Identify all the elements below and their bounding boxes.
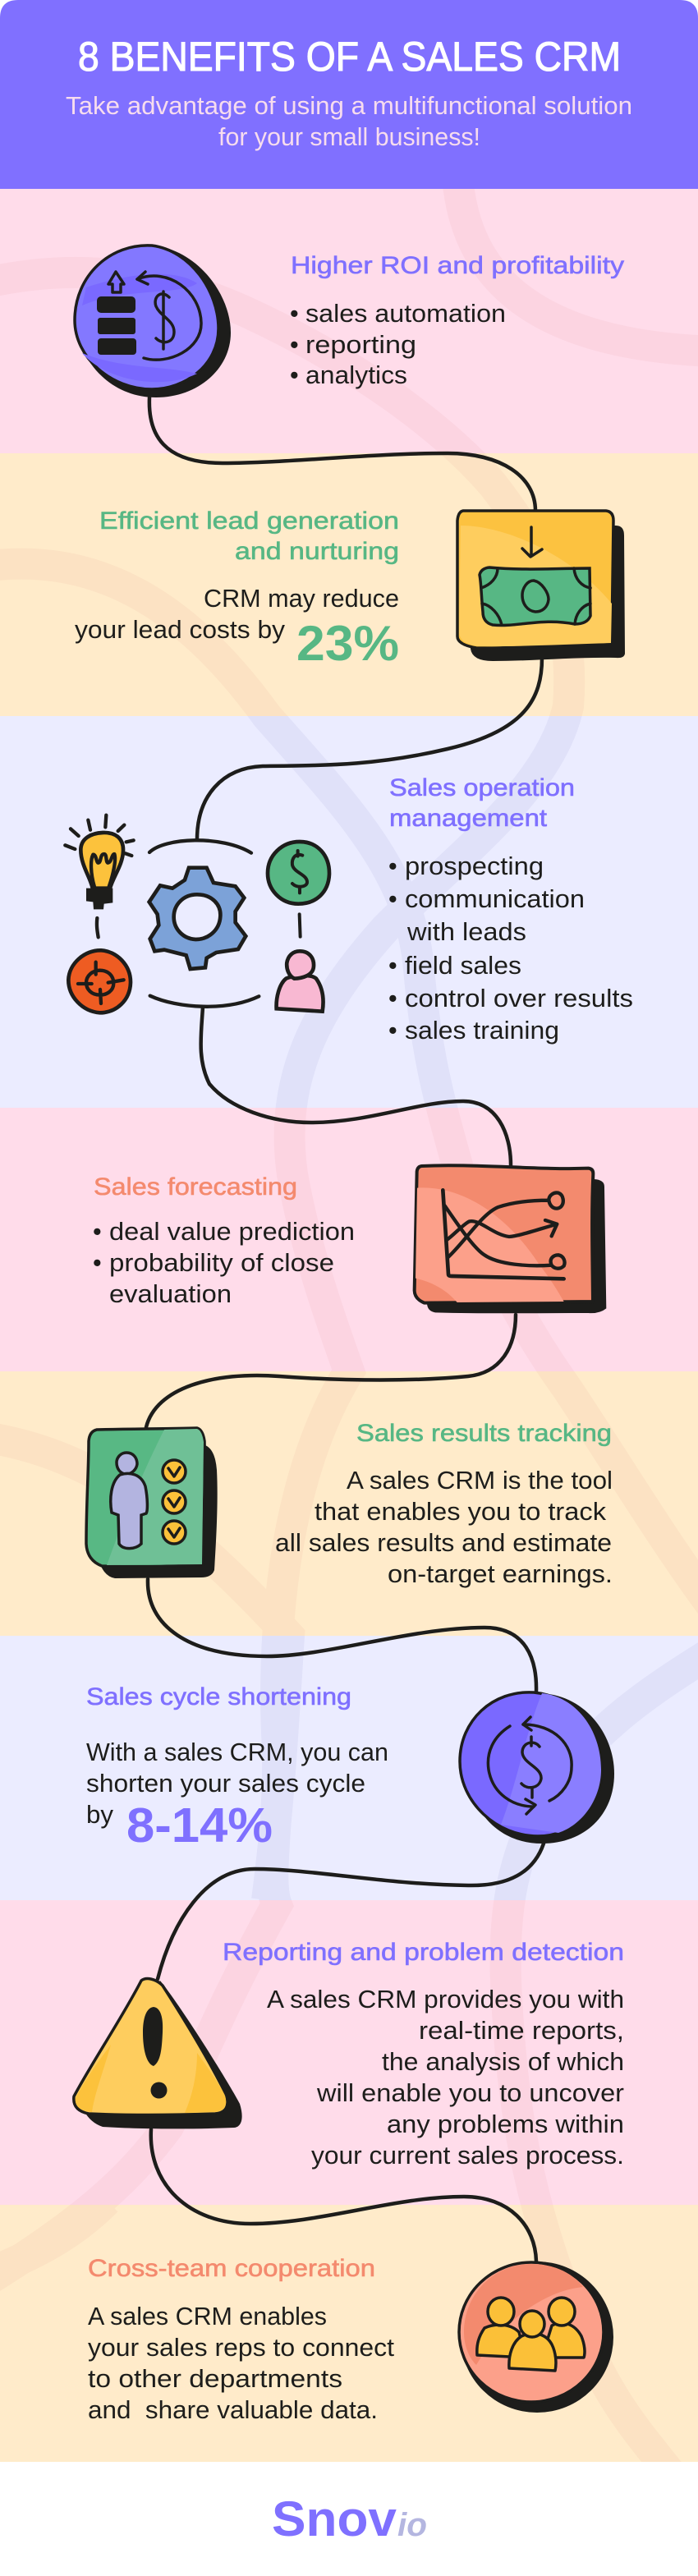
- subtitle: Take advantage of using a multifunctional solution: [66, 91, 632, 120]
- body text: that enables you to track: [315, 1498, 607, 1526]
- heading: Sales forecasting: [94, 1173, 297, 1201]
- heading: management: [389, 805, 548, 832]
- bullet list: •: [388, 952, 397, 980]
- title: 8 BENEFITS OF A SALES CRM: [78, 34, 621, 80]
- statistic text: With a sales CRM, you can: [86, 1738, 388, 1766]
- statistic text: by: [86, 1801, 114, 1829]
- body text: all sales results and estimate: [275, 1529, 612, 1557]
- body text: your current sales process.: [311, 2142, 624, 2170]
- icon: gear: [149, 868, 246, 969]
- icon: ROI coin: [75, 246, 231, 397]
- statistic text: CRM may reduce: [204, 585, 399, 613]
- bullet list: prospecting: [405, 852, 544, 880]
- bullet list: •: [388, 885, 397, 913]
- panel: reporting and problem detection: [74, 1939, 624, 2170]
- bullet list: •: [388, 985, 397, 1012]
- icon: team coin: [459, 2261, 613, 2413]
- icon: sales operation cluster: [65, 815, 329, 1012]
- icon: bulb: [65, 815, 134, 937]
- statistic text: [75, 585, 399, 671]
- icon: chart card: [415, 1165, 606, 1313]
- heading: Reporting and problem detection: [223, 1939, 624, 1966]
- arcs around gear: [149, 840, 259, 1007]
- heading: and nurturing: [235, 538, 399, 565]
- body text: to other departments: [88, 2365, 342, 2393]
- body text: the analysis of which: [382, 2048, 624, 2076]
- body text: your sales reps to connect: [88, 2334, 395, 2362]
- body text: any problems within: [387, 2110, 624, 2138]
- panel: higher ROI: [75, 246, 624, 397]
- bullet list: sales automation: [305, 300, 506, 328]
- bullet list: analytics: [305, 361, 407, 389]
- panel: sales results tracking: [86, 1420, 613, 1588]
- bullet list: [290, 300, 506, 389]
- icon: dollar coin: [268, 842, 329, 937]
- body text: and share valuable data.: [88, 2396, 378, 2424]
- bullet list: probability of close: [109, 1249, 334, 1277]
- panel: sales forecasting: [93, 1165, 606, 1313]
- bullet list: with leads: [406, 918, 526, 946]
- statistic text: your lead costs by: [75, 616, 286, 644]
- body text: [88, 2303, 395, 2424]
- body text: will enable you to uncover: [316, 2079, 624, 2107]
- statistic text: 8-14%: [126, 1798, 273, 1853]
- logo: Snovio: Snov: [272, 2491, 397, 2546]
- header panel: [0, 0, 698, 189]
- heading: Sales cycle shortening: [86, 1683, 351, 1710]
- body text: A sales CRM provides you with: [267, 1986, 624, 2014]
- panel: cross-team cooperation: [88, 2255, 613, 2424]
- bullet list: •: [388, 852, 397, 880]
- bullet list: •: [93, 1249, 102, 1277]
- heading: [389, 774, 575, 832]
- icon: warning triangle: [74, 1979, 242, 2128]
- bullet list: deal value prediction: [109, 1218, 355, 1246]
- panel: lead generation: [75, 507, 625, 671]
- bullet list: •: [290, 300, 299, 328]
- icon: dollar cycle coin: [460, 1692, 614, 1844]
- icon: target: [68, 950, 131, 1012]
- heading: [99, 507, 399, 565]
- bullet list: reporting: [305, 331, 416, 359]
- heading: Efficient lead generation: [99, 507, 399, 535]
- bullet list: field sales: [405, 952, 521, 980]
- connector lines between icons: [146, 397, 544, 2261]
- heading: Sales results tracking: [356, 1420, 612, 1447]
- body text: real-time reports,: [419, 2017, 624, 2045]
- bullet list: •: [93, 1218, 102, 1246]
- heading: Higher ROI and profitability: [291, 252, 624, 279]
- logo: Snovio: io: [397, 2507, 427, 2543]
- icon: person checklist card: [86, 1428, 218, 1578]
- heading: Cross-team cooperation: [88, 2255, 375, 2282]
- check marks: [163, 1460, 186, 1544]
- bullet list: [93, 1218, 355, 1308]
- body text: on-target earnings.: [388, 1560, 613, 1588]
- subtitle: for your small business!: [218, 122, 480, 151]
- bullet list: control over results: [405, 985, 633, 1012]
- body text: A sales CRM enables: [88, 2303, 327, 2330]
- bullet list: •: [388, 1017, 397, 1045]
- bullet list: evaluation: [109, 1280, 232, 1308]
- statistic text: [86, 1738, 388, 1853]
- heading: Sales operation: [389, 774, 575, 801]
- body text: A sales CRM is the tool: [347, 1467, 613, 1495]
- body text: [275, 1467, 613, 1588]
- body text: [267, 1986, 624, 2170]
- icon: money card: [457, 511, 625, 661]
- bullet list: communication: [405, 885, 585, 913]
- statistic text: 23%: [296, 616, 399, 671]
- panel: sales cycle shortening: [86, 1683, 614, 1853]
- bullet list: [388, 852, 633, 1045]
- bullet list: sales training: [405, 1017, 559, 1045]
- subtitle: [66, 91, 632, 151]
- bullet list: •: [290, 361, 299, 389]
- icon: person: [277, 951, 324, 1012]
- statistic text: shorten your sales cycle: [86, 1770, 365, 1798]
- bullet list: •: [290, 331, 299, 359]
- panel: sales operation management: [65, 774, 633, 1045]
